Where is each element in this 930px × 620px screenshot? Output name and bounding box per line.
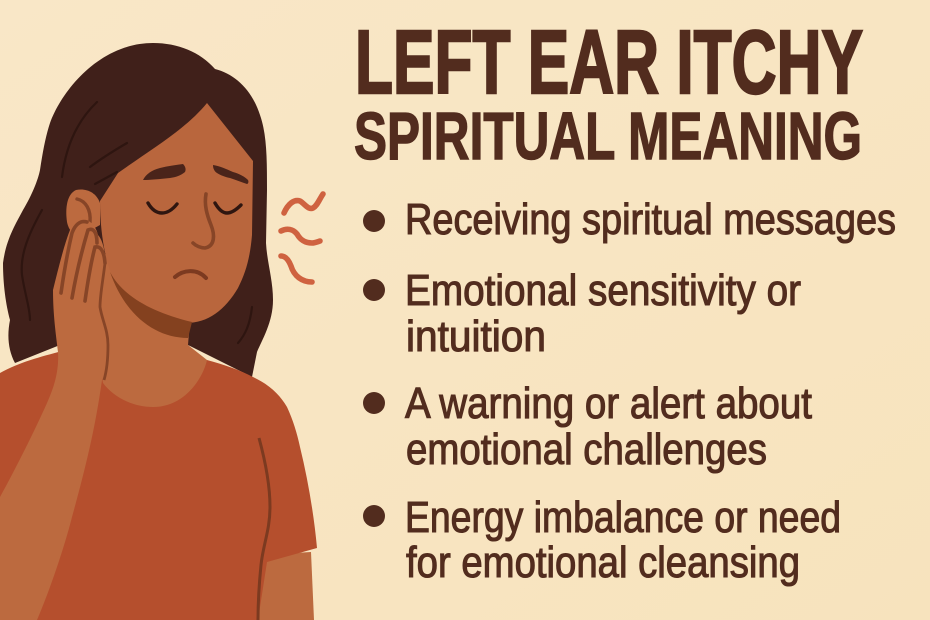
ear fold	[77, 199, 90, 222]
closed eyes	[148, 203, 241, 213]
shirt	[0, 351, 317, 620]
nose	[193, 194, 213, 248]
neck	[95, 250, 207, 407]
raised hand and forearm	[0, 219, 108, 620]
bullet 3: A warning or alert about	[405, 379, 812, 428]
title	[354, 13, 863, 174]
jaw shadow	[110, 272, 192, 338]
bullet 2: Emotional sensitivity or	[405, 266, 801, 315]
bullet 4: Energy imbalance or need	[405, 493, 841, 542]
hair strands	[22, 102, 252, 343]
bullet 3: emotional challenges	[406, 425, 767, 474]
itch squiggles	[281, 194, 323, 282]
mouth	[175, 271, 206, 278]
eyebrows	[143, 164, 248, 184]
left arm behind	[258, 552, 314, 620]
finger lines	[61, 222, 105, 301]
bullet 3	[363, 379, 812, 474]
bullet 4: for emotional cleansing	[406, 538, 800, 587]
ear	[66, 190, 100, 235]
wrist line	[100, 263, 108, 380]
face	[100, 103, 253, 323]
bullet 2: intuition	[406, 312, 546, 361]
bullet 4	[363, 493, 841, 587]
hair	[3, 43, 273, 377]
shirt seam	[258, 438, 270, 620]
bullet list	[363, 195, 896, 587]
bullet 2	[363, 266, 801, 361]
illustration: woman touching left ear	[0, 43, 323, 620]
